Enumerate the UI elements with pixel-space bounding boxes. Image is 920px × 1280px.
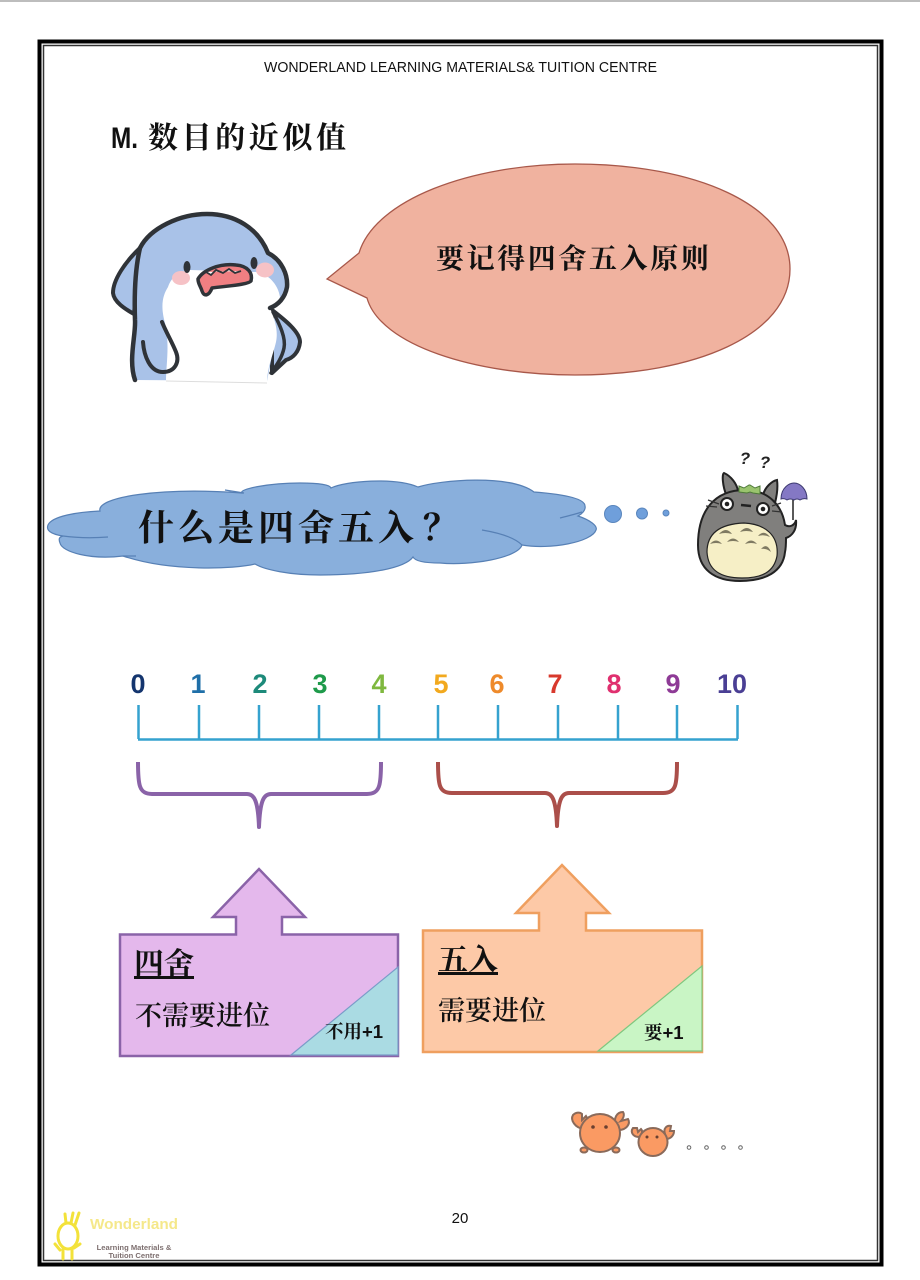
speech bubble text: 要记得四舍五入原则 xyxy=(436,243,711,274)
triangle: 不用+1: 不用+1 xyxy=(325,1021,383,1042)
brace: 5 to 9 xyxy=(438,762,677,826)
number labels: 1 xyxy=(190,669,206,699)
number labels: 9 xyxy=(665,669,681,699)
brace: 0 to 4 xyxy=(138,762,381,827)
icon: totoro with umbrella xyxy=(698,449,807,581)
number labels: 8 xyxy=(606,669,622,699)
box: 四舍 xyxy=(120,869,398,1056)
page header: WONDERLAND LEARNING MATERIALS& TUITION CENTRE xyxy=(264,60,657,76)
text 不需要进位: 不需要进位 xyxy=(135,1001,270,1031)
logo: Wonderland: Tuition Centre xyxy=(109,1251,159,1260)
logo: Wonderland: Learning Materials & xyxy=(97,1243,172,1252)
title: M. xyxy=(111,122,138,155)
icon: shark character xyxy=(113,214,300,383)
title: 数目的近似值 xyxy=(148,122,350,155)
thought cloud: ？ xyxy=(423,507,459,548)
text 需要进位: 需要进位 xyxy=(438,996,546,1026)
small dots xyxy=(687,1146,742,1149)
icon: crabs xyxy=(572,1112,674,1156)
thought dots xyxy=(604,506,669,522)
number labels: 2 xyxy=(252,669,268,699)
triangle: 要+1 xyxy=(598,966,702,1051)
thought cloud xyxy=(48,480,596,575)
number labels: 4 xyxy=(371,669,387,699)
page number: 20 xyxy=(452,1210,468,1227)
cloud text: 什么是四舍五入 xyxy=(138,507,418,548)
heading 五入: 五入 xyxy=(438,944,498,977)
logo: Wonderland xyxy=(55,1213,178,1260)
number labels xyxy=(130,669,747,699)
logo: Wonderland: Wonderland xyxy=(90,1217,178,1233)
number line xyxy=(130,669,747,740)
number labels: 3 xyxy=(312,669,328,699)
speech bubble xyxy=(327,164,790,375)
heading 四舍: 四舍 xyxy=(134,948,194,981)
icon: totoro with umbrella: ? xyxy=(740,449,751,468)
number labels: 0 xyxy=(130,669,146,699)
icon: totoro with umbrella: ? xyxy=(760,453,771,472)
triangle: 要+1: 要+1 xyxy=(644,1022,684,1043)
number labels: 10 xyxy=(717,669,747,699)
line and ticks xyxy=(138,705,738,740)
number labels: 7 xyxy=(547,669,563,699)
number labels: 6 xyxy=(489,669,505,699)
number labels: 5 xyxy=(433,669,449,699)
triangle: 不用+1 xyxy=(291,967,398,1055)
box: 五入 xyxy=(423,865,702,1052)
